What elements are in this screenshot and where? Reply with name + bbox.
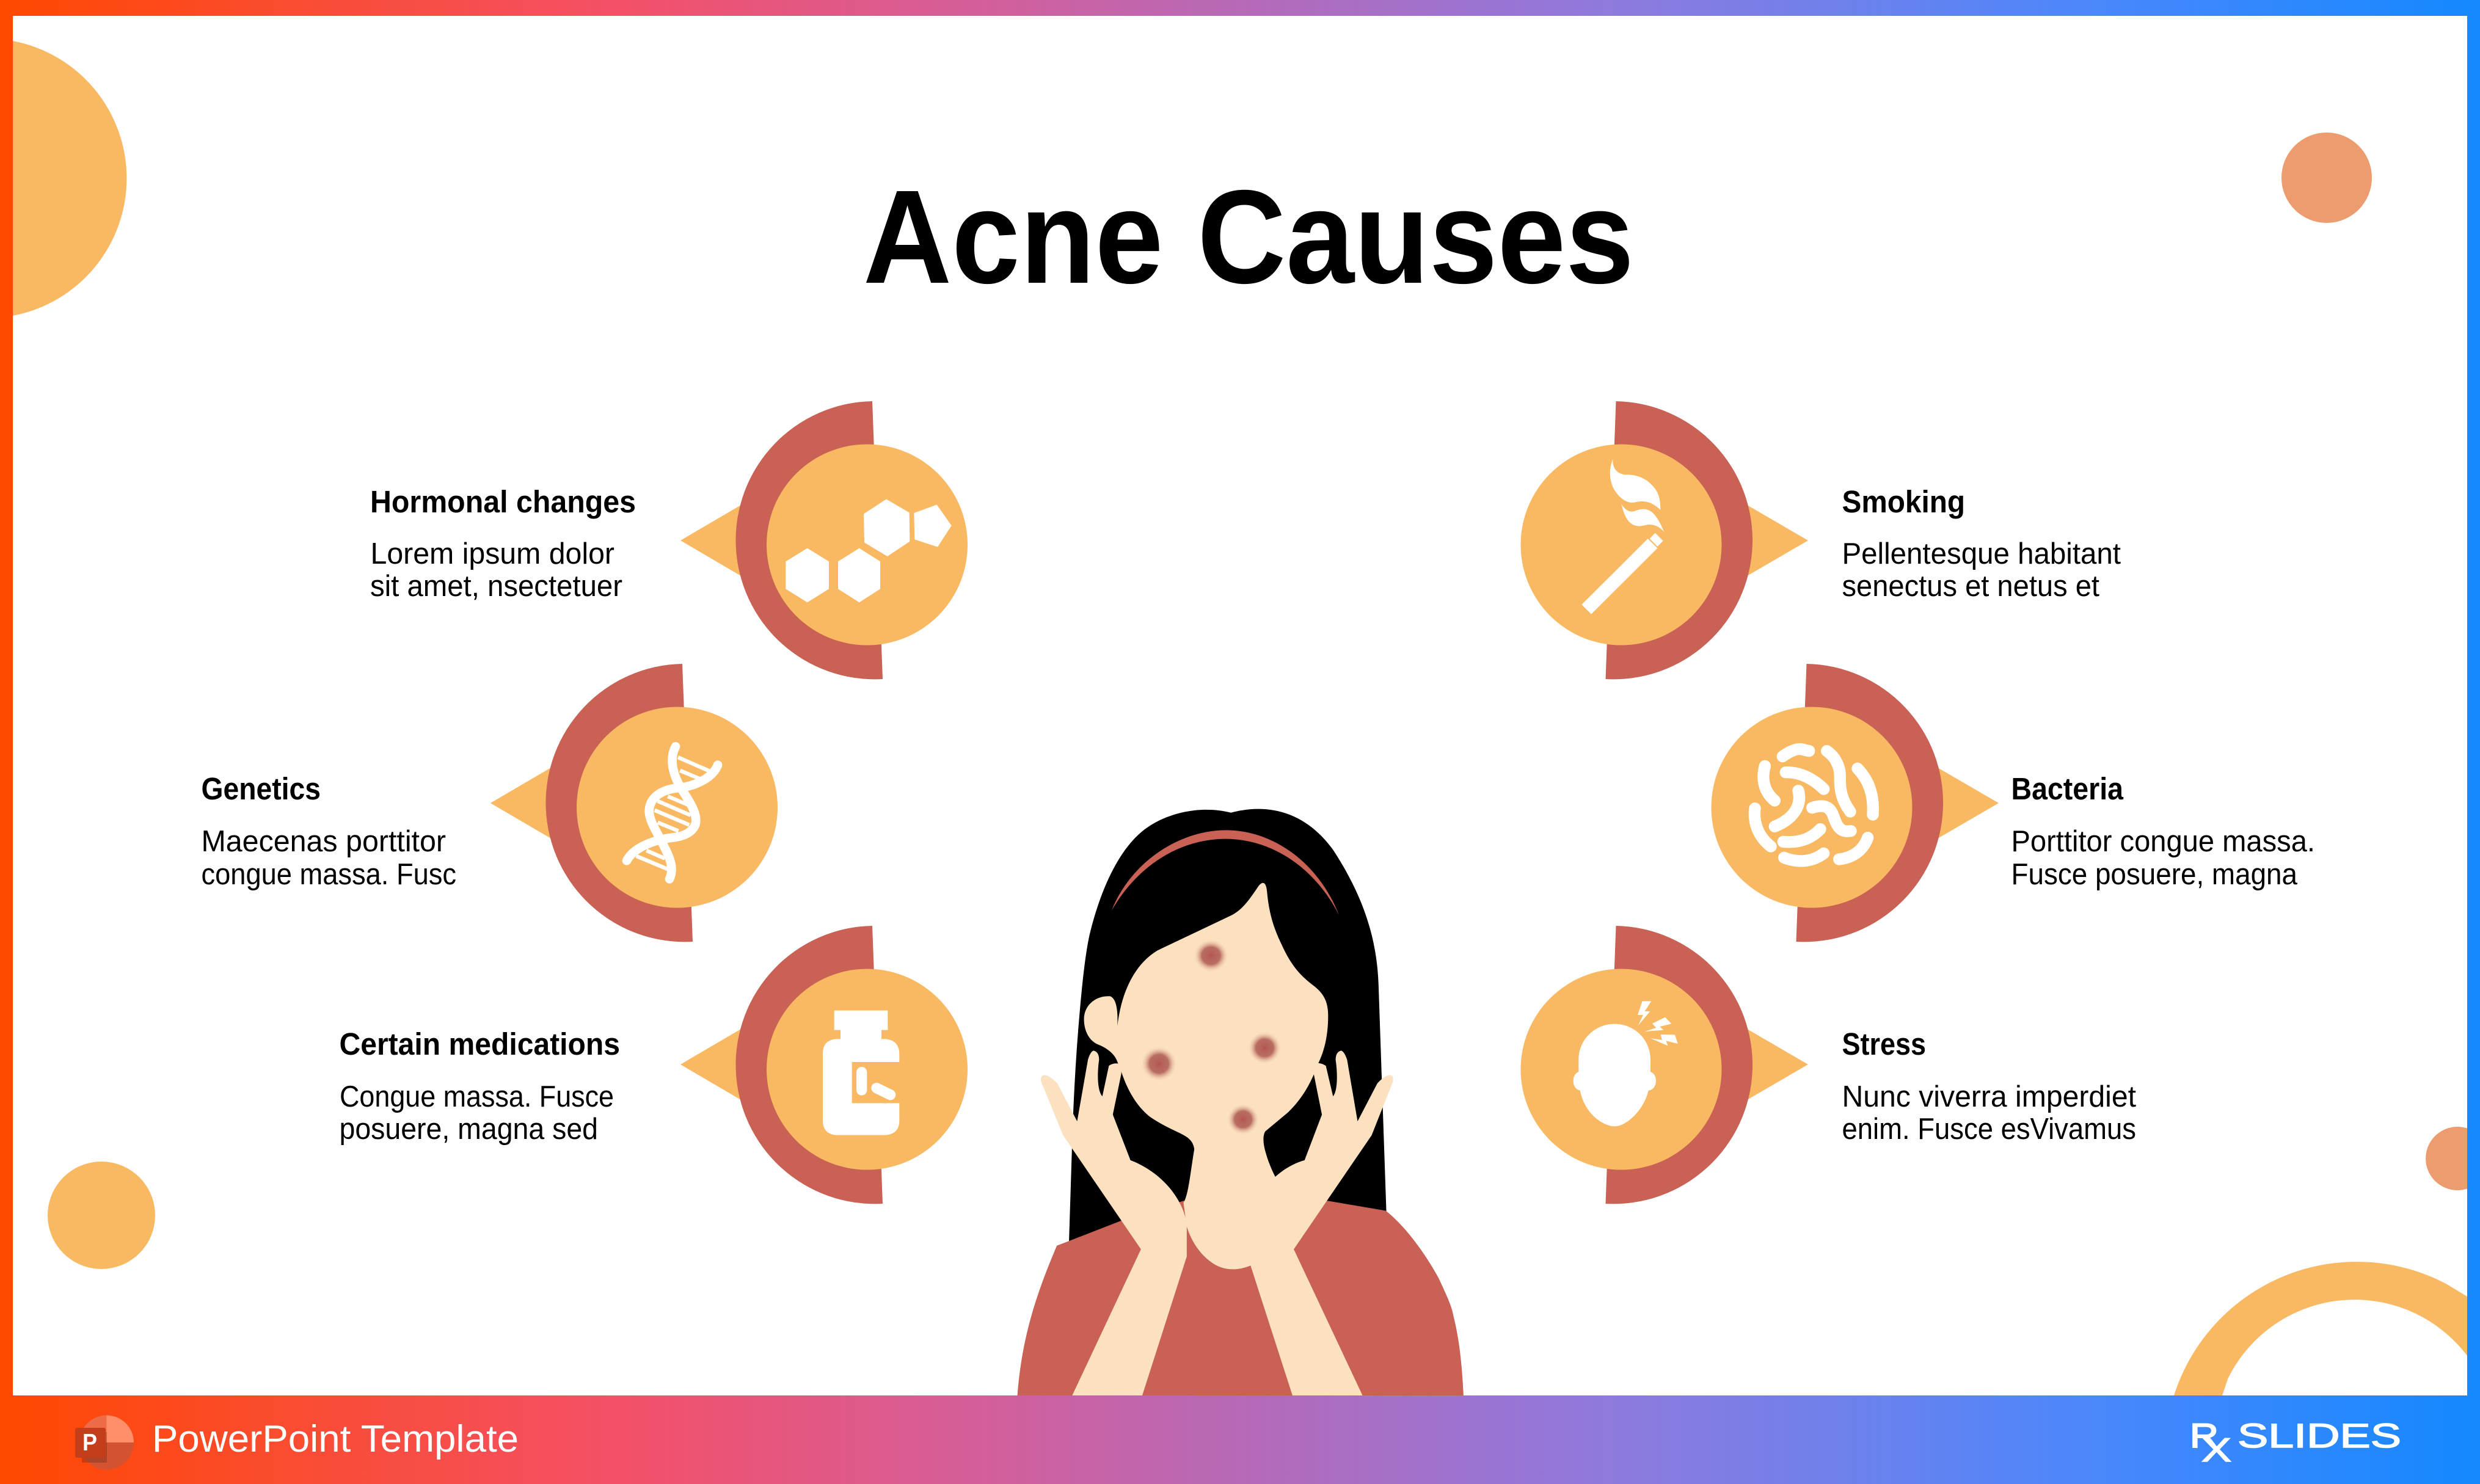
red arc	[1796, 664, 1943, 942]
face and neck	[1084, 883, 1328, 1269]
label: smoking: Pellentesque habitant	[1842, 537, 2121, 570]
panel: genetics	[202, 664, 778, 942]
label: certain medications: Congue massa. Fusce	[340, 1080, 614, 1113]
pimple: left cheek	[1140, 1046, 1177, 1082]
orange disc	[1521, 969, 1721, 1170]
hair	[1069, 809, 1387, 1259]
pimple: chin	[1227, 1104, 1260, 1135]
decorative circle: top left	[13, 41, 126, 316]
label: genetics: Maecenas porttitor	[202, 825, 446, 858]
panel: stress	[1521, 926, 2136, 1204]
label: smoking: senectus et netus et	[1842, 570, 2099, 603]
icon: medicine bottle	[823, 1011, 899, 1135]
label: stress: Stress	[1842, 1027, 1926, 1061]
label: certain medications: posuere, magna sed	[340, 1113, 598, 1146]
orange disc	[1712, 707, 1912, 907]
logo: Rx Slides: X	[2201, 1431, 2231, 1469]
label: certain medications	[340, 1027, 620, 1146]
title: Acne Causes	[863, 163, 1634, 311]
label: bacteria: Porttitor congue massa.	[2011, 825, 2315, 858]
logo: Rx Slides: R	[2190, 1416, 2219, 1455]
icon: PowerPoint logo	[75, 1416, 134, 1469]
pointer arrow	[1737, 499, 1808, 582]
right hand and arm	[1239, 1050, 1393, 1397]
label: hormonal changes: Lorem ipsum dolor	[370, 537, 615, 570]
label: stress	[1842, 1027, 2136, 1146]
icon: cigarette	[1581, 459, 1664, 614]
left hand and arm	[1041, 1050, 1187, 1397]
label: smoking	[1842, 484, 2121, 603]
pointer arrow	[1737, 1023, 1808, 1106]
decorative ring: bottom right	[2174, 1262, 2467, 1395]
headband	[1112, 830, 1339, 915]
icon: head with lightning bolts	[1574, 1001, 1678, 1126]
label: bacteria	[2011, 771, 2315, 891]
footer label: PowerPoint Template	[152, 1418, 519, 1460]
pointer arrow	[680, 499, 751, 582]
icon: bacteria cluster	[1754, 749, 1873, 861]
decorative circle: top right	[2281, 133, 2372, 223]
label: stress: enim. Fusce esVivamus	[1842, 1113, 2136, 1146]
decorative circle: right edge	[2426, 1127, 2467, 1190]
orange disc	[767, 445, 968, 645]
icon: hormone molecules	[786, 499, 952, 602]
red arc	[1605, 926, 1752, 1204]
label: genetics: Genetics	[202, 771, 321, 806]
panel: bacteria	[1712, 664, 2315, 942]
red arc	[545, 664, 693, 942]
red arc	[735, 926, 883, 1204]
label: smoking: Smoking	[1842, 484, 1965, 519]
icon: PowerPoint logo: P	[82, 1430, 97, 1456]
shirt	[1017, 1201, 1464, 1397]
logo: Rx Slides: SLIDES	[2237, 1416, 2401, 1455]
pointer arrow	[1927, 762, 1999, 845]
label: hormonal changes	[370, 484, 636, 603]
label: genetics	[202, 771, 456, 891]
label: bacteria: Fusce posuere, magna	[2011, 858, 2298, 891]
icon: DNA helix	[627, 746, 718, 879]
panel: certain medications	[340, 926, 968, 1204]
label: hormonal changes: Hormonal changes	[370, 484, 636, 519]
orange disc	[767, 969, 968, 1170]
logo: Rx Slides	[2190, 1416, 2401, 1469]
label: bacteria: Bacteria	[2011, 771, 2124, 806]
pointer arrow	[491, 762, 561, 845]
pimple: right cheek	[1247, 1031, 1282, 1064]
pimple: forehead	[1194, 939, 1228, 972]
red arc	[1605, 401, 1752, 679]
pointer arrow	[680, 1023, 751, 1106]
label: stress: Nunc viverra imperdiet	[1842, 1080, 2136, 1113]
panel: hormonal changes	[370, 401, 968, 679]
illustration: girl with acne	[1017, 809, 1464, 1397]
orange disc	[1521, 445, 1721, 645]
decorative circle: bottom left	[48, 1162, 155, 1269]
red arc	[735, 401, 883, 679]
label: certain medications: Certain medications	[340, 1027, 620, 1061]
orange disc	[577, 707, 778, 907]
panel: smoking	[1521, 401, 2121, 679]
label: genetics: congue massa. Fusc	[202, 858, 456, 891]
label: hormonal changes: sit amet, nsectetuer	[370, 570, 622, 603]
